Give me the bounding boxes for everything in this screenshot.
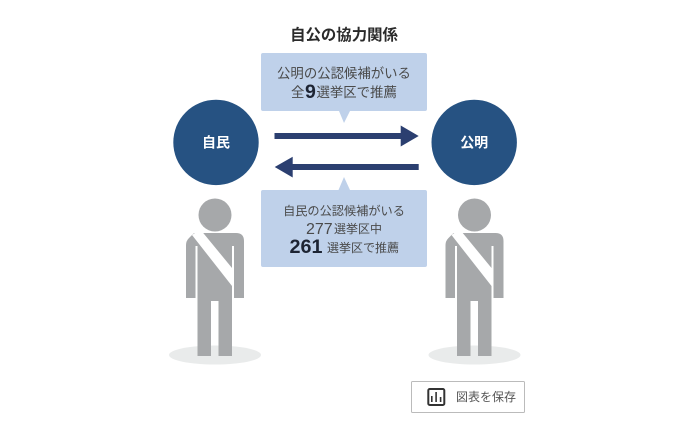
circle: LDP xyxy=(173,100,259,185)
callout: LDP recommendation xyxy=(261,177,427,267)
title: 自公の協力関係 xyxy=(290,26,398,44)
callout: LDP recommendation: 選挙区中 xyxy=(334,221,382,236)
callout: Komeito recommendation: 9 xyxy=(305,81,316,103)
callout: Komeito recommendation: 全 xyxy=(291,85,304,100)
figure: LDP candidate xyxy=(169,198,261,364)
circle: Komeito: 公明 xyxy=(460,134,488,150)
callout: LDP recommendation: 自民の公認候補がいる xyxy=(283,203,405,218)
arrow: LDP to Komeito xyxy=(274,126,419,146)
callout: Komeito recommendation: 選挙区で推薦 xyxy=(316,85,397,100)
button: save chart xyxy=(412,382,524,412)
icon: bar chart xyxy=(428,389,444,405)
callout: Komeito recommendation: 公明の公認候補がいる xyxy=(277,66,411,81)
figure: Komeito candidate xyxy=(428,198,520,364)
callout: Komeito recommendation xyxy=(261,53,427,123)
callout: LDP recommendation: 選挙区で推薦 xyxy=(327,240,399,255)
arrow: Komeito to LDP xyxy=(275,157,419,178)
callout: LDP recommendation: 277 xyxy=(306,221,333,238)
callout: LDP recommendation: 261 xyxy=(290,236,323,258)
circle: LDP: 自民 xyxy=(202,134,230,150)
circle: Komeito xyxy=(432,100,517,185)
button: save chart: 図表を保存 xyxy=(456,390,516,404)
